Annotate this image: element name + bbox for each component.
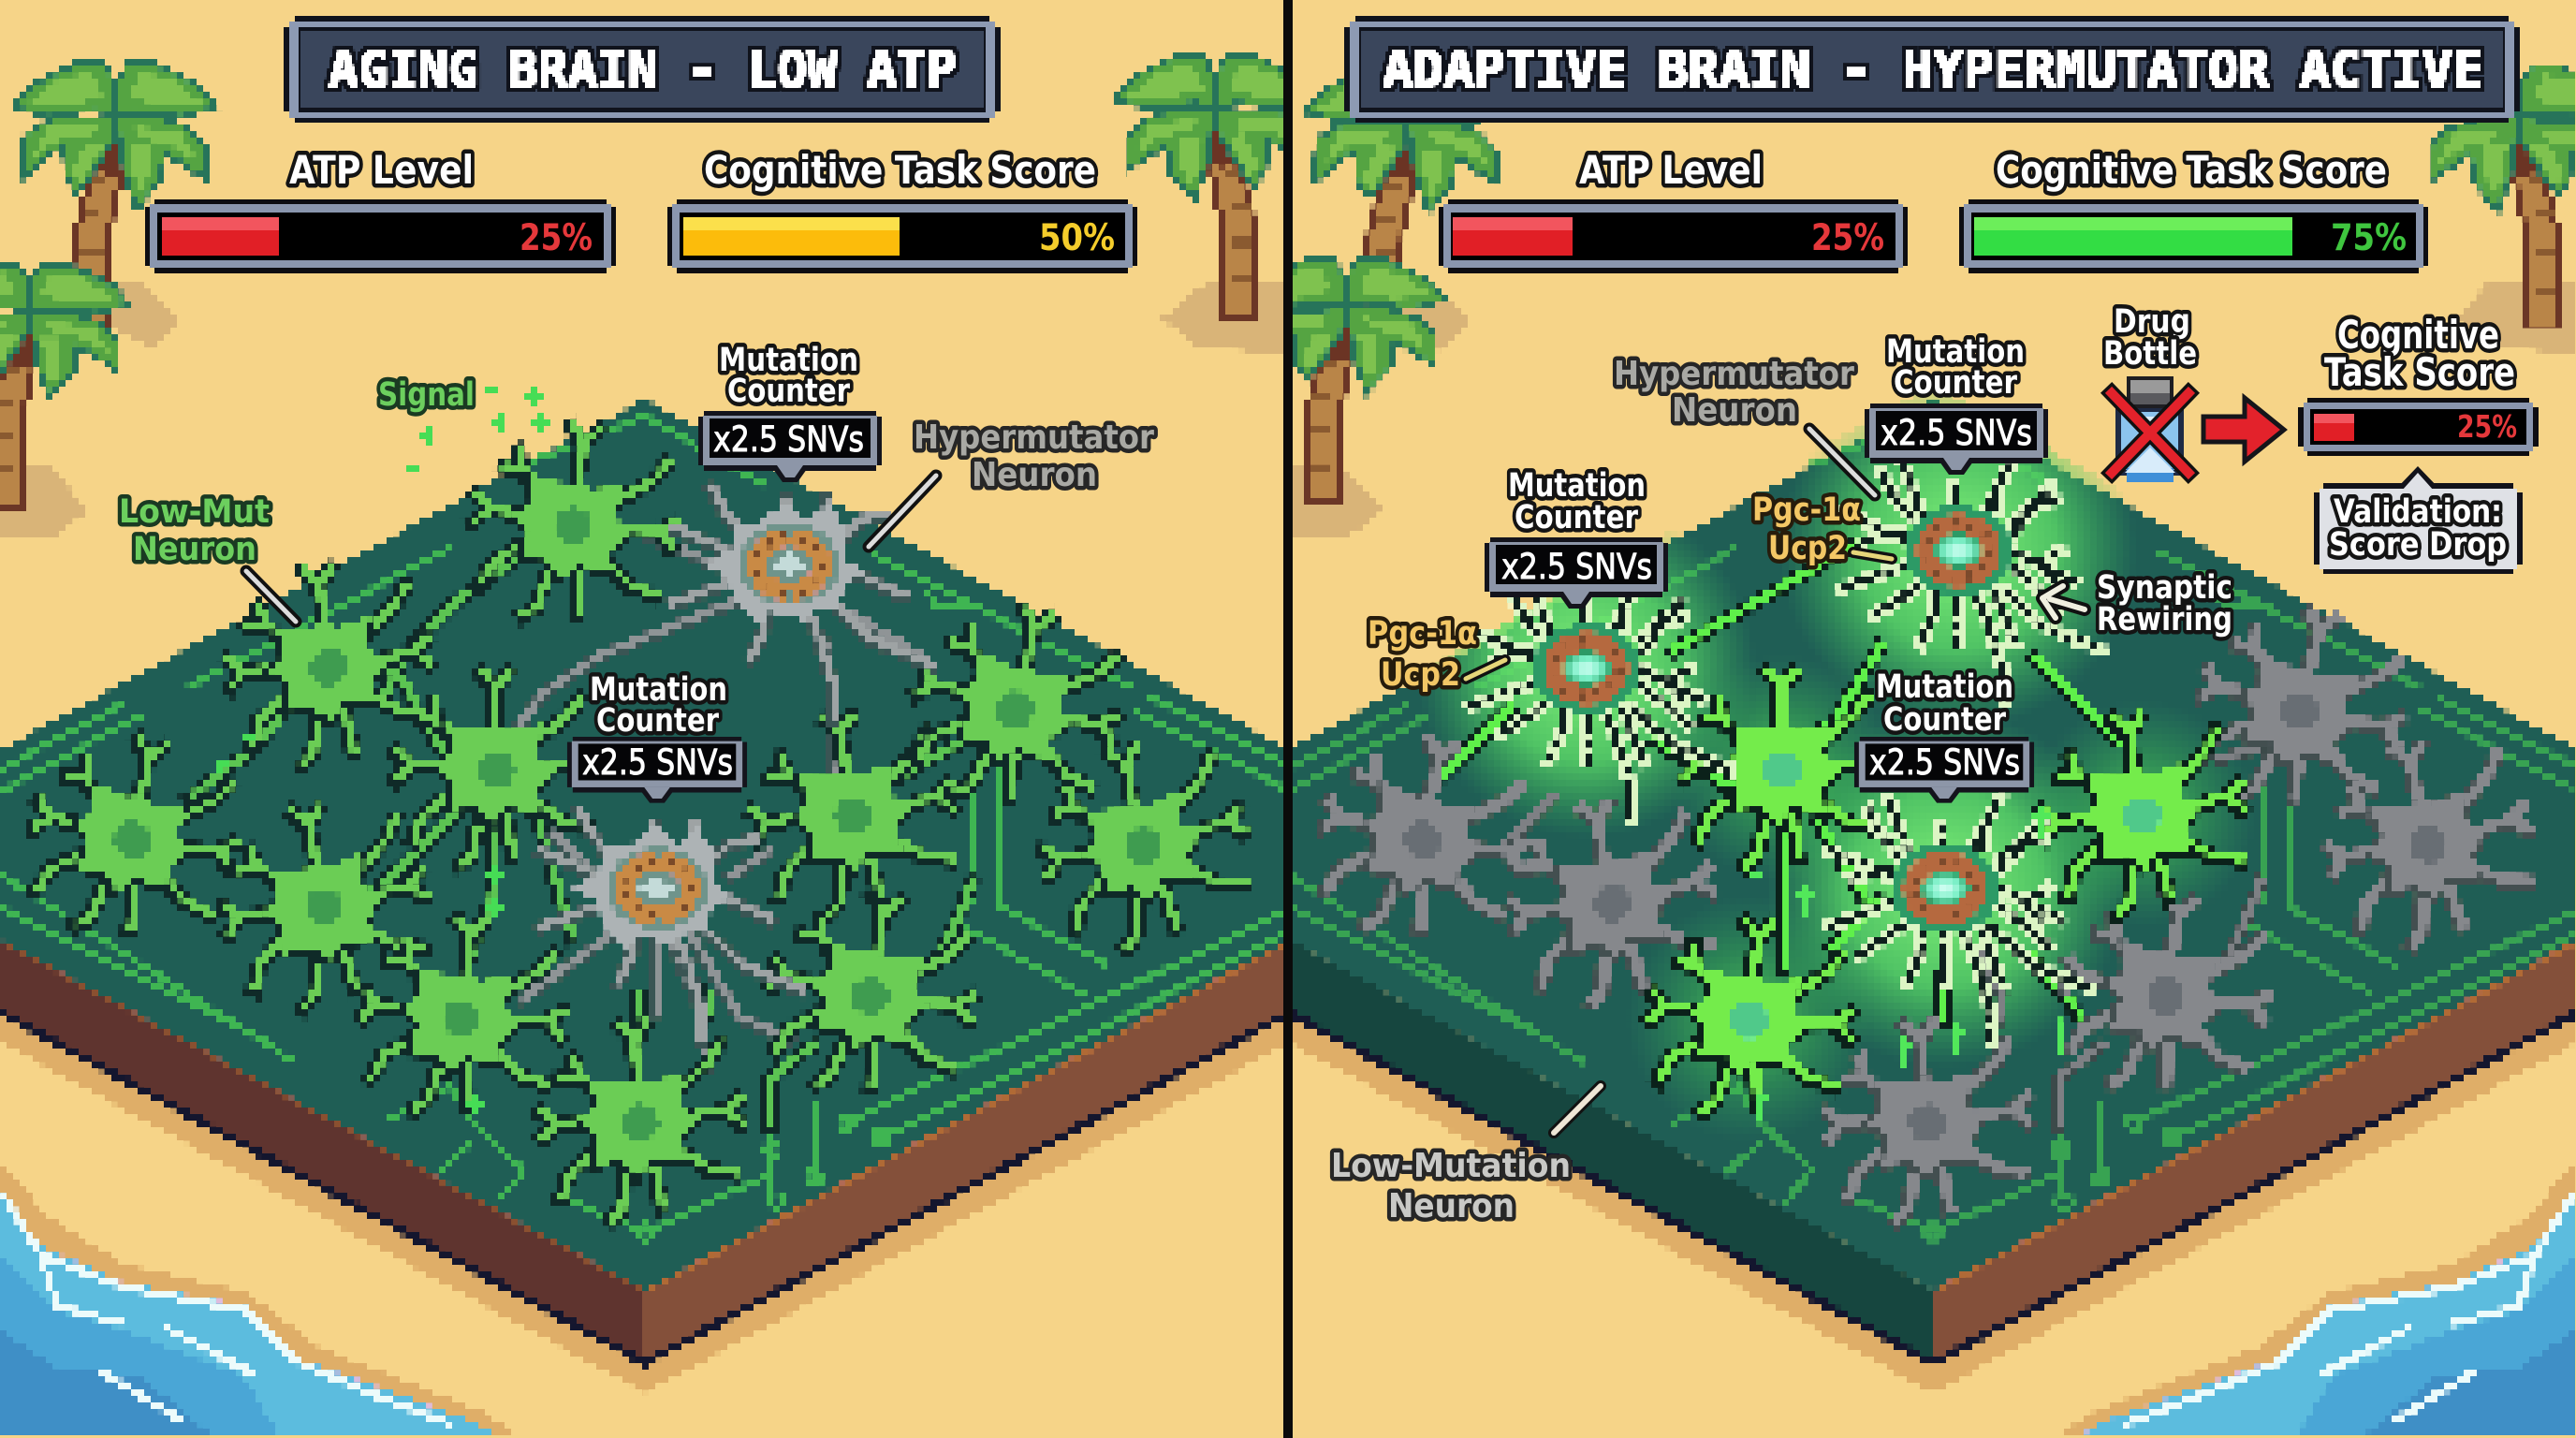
- board top surface: [0, 399, 1464, 1290]
- palm tree shadows: [0, 279, 1281, 536]
- icon: drug bottle crossed out: Drug: [2114, 303, 2190, 341]
- validation score meter: 25%: [2457, 408, 2517, 445]
- callout: mutation counter top: Counter: [727, 373, 851, 410]
- palm tree mid left right panel: [1244, 259, 1446, 501]
- callout: low-mut neuron: Neuron: [133, 531, 256, 568]
- callout: mutation counter left: x2.5 SNVs: [1501, 547, 1652, 587]
- icon: drug bottle crossed out: Bottle: [2103, 335, 2197, 373]
- label: pgc-1a and ucp2 left: [1368, 615, 1505, 694]
- ATP level meter: ATP Level: [1579, 147, 1763, 193]
- label: pgc-1a and ucp2 top: Pgc-1α: [1752, 492, 1861, 529]
- palm tree mid left: [0, 264, 129, 506]
- callout: hypermutator neuron: Neuron: [1672, 391, 1797, 430]
- callout: low-mutation neuron: Neuron: [1388, 1187, 1515, 1225]
- title: aging brain: [284, 16, 1001, 123]
- callout: hypermutator neuron: Hypermutator: [914, 418, 1154, 457]
- cognitive task score meter: [667, 147, 1137, 273]
- palm tree right: [1115, 56, 1317, 318]
- callout: hypermutator neuron: Hypermutator: [1614, 355, 1854, 393]
- label: pgc-1a and ucp2 top: Ucp2: [1768, 530, 1847, 567]
- ATP level meter: 25%: [1811, 217, 1884, 259]
- callout: mutation counter center: [567, 671, 747, 803]
- callout: mutation counter center: Counter: [596, 702, 720, 740]
- palm tree top left: [14, 64, 216, 326]
- ocean waves: [0, 1161, 520, 1438]
- title: adaptive brain: ADAPTIVE BRAIN - HYPERMUTATOR ACTIVE: [1383, 40, 2483, 99]
- board rim on sand: [0, 916, 1464, 1393]
- title: aging brain: AGING BRAIN - LOW ATP: [329, 40, 957, 99]
- label: pgc-1a and ucp2 left: Ucp2: [1381, 656, 1460, 694]
- callout: mutation counter center: Mutation: [590, 671, 727, 709]
- callout: mutation counter left: Mutation: [1508, 467, 1646, 505]
- synapse wires green: [190, 552, 973, 1125]
- center divider: [1283, 0, 1293, 1438]
- cognitive task score meter: Cognitive Task Score: [704, 147, 1096, 193]
- callout: mutation counter left: [1485, 467, 1668, 609]
- ATP level meter: ATP Level: [289, 147, 474, 193]
- callout: synaptic rewiring: Rewiring: [2097, 601, 2232, 638]
- callout: mutation counter center: Counter: [1883, 701, 2007, 739]
- board left wall right panel: [1114, 844, 1933, 1361]
- palm tree right right panel: [2419, 66, 2576, 328]
- callout: low-mut neuron: [119, 493, 296, 622]
- cognitive task score meter: 50%: [1039, 217, 1115, 259]
- palm tree shadows right: [1292, 279, 2576, 536]
- board top surface right panel: [1114, 399, 2576, 1290]
- callout: validation score drop: [2314, 466, 2523, 574]
- label: pgc-1a and ucp2 left: Pgc-1α: [1368, 615, 1477, 653]
- callout: mutation counter top: [698, 342, 882, 482]
- title: adaptive brain: [1344, 16, 2520, 123]
- circuit traces: [0, 416, 1284, 1240]
- board right wall: [645, 844, 1464, 1361]
- rewired synapses: [1443, 543, 2119, 1022]
- circuit traces right panel: [1288, 416, 2572, 1240]
- label: signal: Signal: [378, 376, 475, 414]
- validation score meter: Cognitive: [2337, 312, 2499, 358]
- ATP level meter: 25%: [520, 217, 593, 259]
- palm tree top left right panel: [1306, 68, 1508, 330]
- ocean waves right panel: [2056, 1161, 2576, 1438]
- ATP level meter: [145, 147, 616, 273]
- callout: mutation counter center: x2.5 SNVs: [582, 742, 733, 783]
- right panel scene: [1114, 0, 2576, 1438]
- board right wall right panel: [1933, 844, 2576, 1361]
- panel: aging brain: [119, 16, 1154, 803]
- panel: adaptive brain: [1331, 16, 2539, 1225]
- callout: mutation counter top: x2.5 SNVs: [713, 419, 864, 460]
- callout: hypermutator neuron: [1614, 355, 1875, 495]
- synapse wires gray: [521, 534, 922, 1069]
- validation score meter: Task Score: [2324, 349, 2515, 395]
- callout: hypermutator neuron: Neuron: [972, 456, 1097, 494]
- hypermutator neurons: [541, 487, 932, 1043]
- hypermutator neurons active: [1471, 457, 2101, 1041]
- cognitive task score meter: 75%: [2331, 217, 2407, 259]
- callout: mutation counter top: Mutation: [1886, 333, 2025, 371]
- signal arrows: [1748, 805, 2069, 1123]
- callout: mutation counter center: x2.5 SNVs: [1869, 742, 2020, 783]
- arrow: drug to score: [2203, 398, 2284, 462]
- callout: synaptic rewiring: [2042, 569, 2232, 638]
- signal particles: [213, 384, 549, 1113]
- callout: mutation counter top: Counter: [1894, 364, 2018, 402]
- ATP level meter: [1439, 147, 1908, 273]
- cognitive task score meter: [1959, 147, 2428, 273]
- label: pgc-1a and ucp2 top: [1752, 492, 1892, 567]
- callout: synaptic rewiring: Synaptic: [2097, 569, 2232, 607]
- dormant gray neurons: [1306, 591, 2547, 1225]
- cognitive task score meter: Cognitive Task Score: [1996, 147, 2387, 193]
- neuron glow: [1418, 373, 2254, 1140]
- callout: mutation counter center: Mutation: [1876, 668, 2013, 706]
- dormant wires: [1506, 740, 2284, 1125]
- icon: drug bottle crossed out: [2103, 303, 2197, 482]
- board rim on sand right panel: [1114, 916, 2576, 1393]
- callout: mutation counter top: Mutation: [719, 342, 858, 379]
- callout: mutation counter top: x2.5 SNVs: [1881, 413, 2032, 453]
- callout: low-mutation neuron: [1331, 1086, 1601, 1225]
- callout: mutation counter center: [1854, 668, 2034, 803]
- callout: validation score drop: Score Drop: [2329, 526, 2507, 564]
- callout: low-mutation neuron: Low-Mutation: [1331, 1147, 1571, 1185]
- validation score meter: [2298, 312, 2539, 456]
- callout: low-mut neuron: Low-Mut: [119, 493, 270, 531]
- callout: hypermutator neuron: [869, 418, 1154, 547]
- left panel scene: [0, 52, 1283, 1435]
- low-mutation neurons: [16, 414, 1262, 1225]
- callout: mutation counter left: Counter: [1515, 499, 1639, 536]
- callout: mutation counter top: [1865, 333, 2048, 475]
- board left wall: [0, 844, 645, 1361]
- callout: validation score drop: Validation:: [2334, 493, 2502, 531]
- active green neurons: [1641, 671, 2255, 1126]
